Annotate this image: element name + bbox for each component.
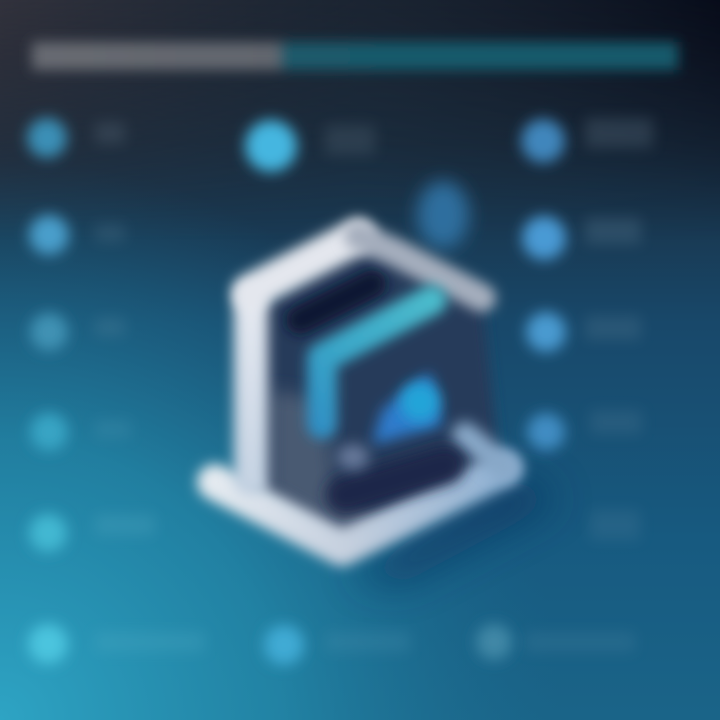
icon: left dot 2: [29, 215, 69, 255]
dark slot on screen: [300, 284, 372, 320]
icon: floating hexagon behind device: [417, 181, 469, 249]
bottom row items: [264, 624, 635, 665]
icon: left dot 4: [30, 413, 68, 451]
icon: left dot 3: [30, 313, 68, 351]
icon: bottom middle dot: [264, 625, 304, 665]
label: right text 5: [590, 510, 640, 540]
label: bottom middle text: [325, 632, 410, 652]
label: right text 2: [585, 218, 641, 244]
white frame base: [215, 468, 505, 548]
central isometric device illustration: [215, 236, 560, 585]
white frame left post: [234, 285, 268, 495]
blue glow shape: [372, 372, 442, 445]
icon: right dot 4: [527, 413, 565, 451]
label: bottom right text: [525, 632, 635, 652]
left interior slate: [270, 390, 385, 535]
icon: left dot 1: [27, 118, 67, 158]
title bar: [32, 42, 678, 70]
grey frame right edge: [358, 236, 482, 298]
right column list: [521, 118, 653, 540]
label: left text 6: [95, 632, 205, 652]
icon: right dot 2: [522, 216, 566, 260]
label: left text 2: [95, 224, 125, 242]
label: right text 3: [585, 316, 641, 340]
label: right text 4: [590, 410, 642, 434]
label: left text 4: [95, 420, 131, 438]
icon: left dot 5: [29, 514, 67, 552]
lower dark keyboard: [345, 465, 445, 495]
label: left text 1: [95, 122, 125, 144]
icon: left dot 6: [28, 624, 68, 664]
label: left text 3: [95, 318, 125, 336]
icon: bottom right dot: [476, 624, 512, 660]
label: left text 5: [95, 515, 155, 535]
bright cyan spot: [400, 382, 440, 422]
top middle item: [245, 120, 375, 172]
label: middle text: [325, 125, 375, 155]
base right corner: [465, 435, 505, 468]
white frame top edge: [250, 236, 358, 292]
icon: bright middle dot: [245, 120, 297, 172]
icon: right dot 1: [521, 119, 565, 163]
icon: right dot 3: [526, 312, 566, 352]
label: right text 1: [585, 118, 653, 148]
small grey keys: [337, 444, 369, 470]
teal panel: [322, 300, 432, 424]
left column list: [27, 118, 205, 664]
dark interior: [255, 240, 500, 548]
device shadow: [350, 475, 560, 585]
